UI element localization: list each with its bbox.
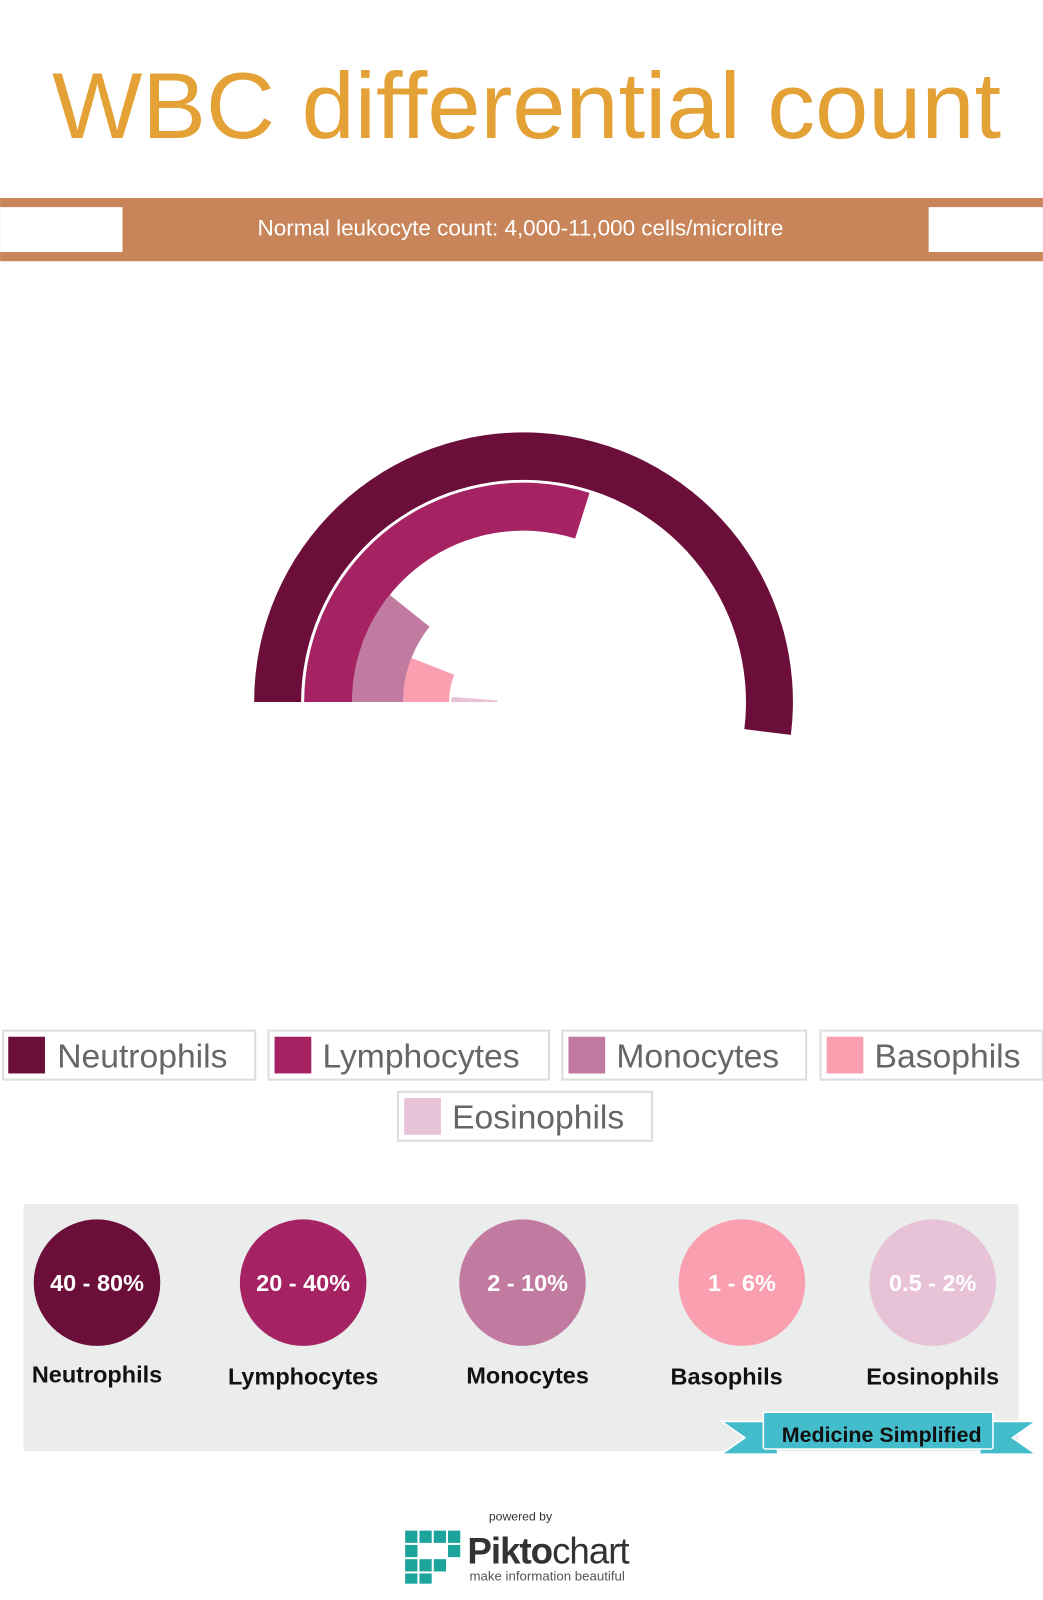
bar: monocytes	[352, 595, 430, 702]
ribbon: Medicine Simplified: Medicine Simplified	[782, 1423, 982, 1447]
icon: piktochart mark	[405, 1531, 460, 1584]
range: lymphocytes: Lymphocytes	[228, 1364, 378, 1390]
range: eosinophils	[866, 1219, 999, 1390]
range: basophils	[671, 1219, 805, 1390]
legend: monocytes	[562, 1031, 806, 1080]
legend	[3, 1031, 1043, 1141]
range: basophils: Basophils	[671, 1364, 783, 1390]
banner text: Normal leukocyte count: 4,000-11,000 cells/microlitre	[258, 216, 783, 241]
title: WBC differential count	[52, 53, 1001, 158]
legend: basophils: Basophils	[875, 1038, 1020, 1075]
legend: eosinophils: Eosinophils	[452, 1100, 624, 1137]
ribbon: Medicine Simplified	[722, 1412, 1036, 1454]
range: neutrophils: Neutrophils	[32, 1362, 162, 1388]
bar: lymphocytes	[304, 483, 590, 702]
banner	[0, 198, 1043, 261]
panel: ranges	[24, 1204, 1018, 1451]
legend: neutrophils: Neutrophils	[57, 1038, 227, 1075]
bar: neutrophils	[254, 432, 793, 735]
range: monocytes	[459, 1219, 589, 1389]
range: monocytes: 2 - 10%	[487, 1270, 568, 1296]
footer: piktochart logo: Piktochart	[467, 1530, 629, 1571]
footer: piktochart logo	[405, 1509, 629, 1584]
legend: basophils	[820, 1031, 1043, 1080]
chart: radial bars	[254, 432, 793, 735]
range: neutrophils: 40 - 80%	[50, 1270, 144, 1296]
range: basophils: 1 - 6%	[708, 1270, 776, 1296]
bar: basophils	[403, 658, 454, 702]
legend: monocytes: Monocytes	[616, 1038, 779, 1075]
legend: lymphocytes	[268, 1031, 549, 1080]
legend: neutrophils	[3, 1031, 255, 1080]
range: eosinophils: Eosinophils	[866, 1364, 999, 1390]
legend: lymphocytes: Lymphocytes	[323, 1038, 520, 1075]
legend: eosinophils	[398, 1092, 652, 1141]
range: eosinophils: 0.5 - 2%	[889, 1270, 977, 1296]
range: neutrophils	[32, 1219, 162, 1388]
bar: eosinophils	[451, 697, 497, 702]
footer: piktochart logo: powered by	[489, 1509, 553, 1523]
footer: piktochart logo: make information beautiful	[469, 1569, 625, 1584]
range: monocytes: Monocytes	[466, 1363, 589, 1389]
range: lymphocytes	[228, 1219, 378, 1390]
range: lymphocytes: 20 - 40%	[256, 1270, 350, 1296]
